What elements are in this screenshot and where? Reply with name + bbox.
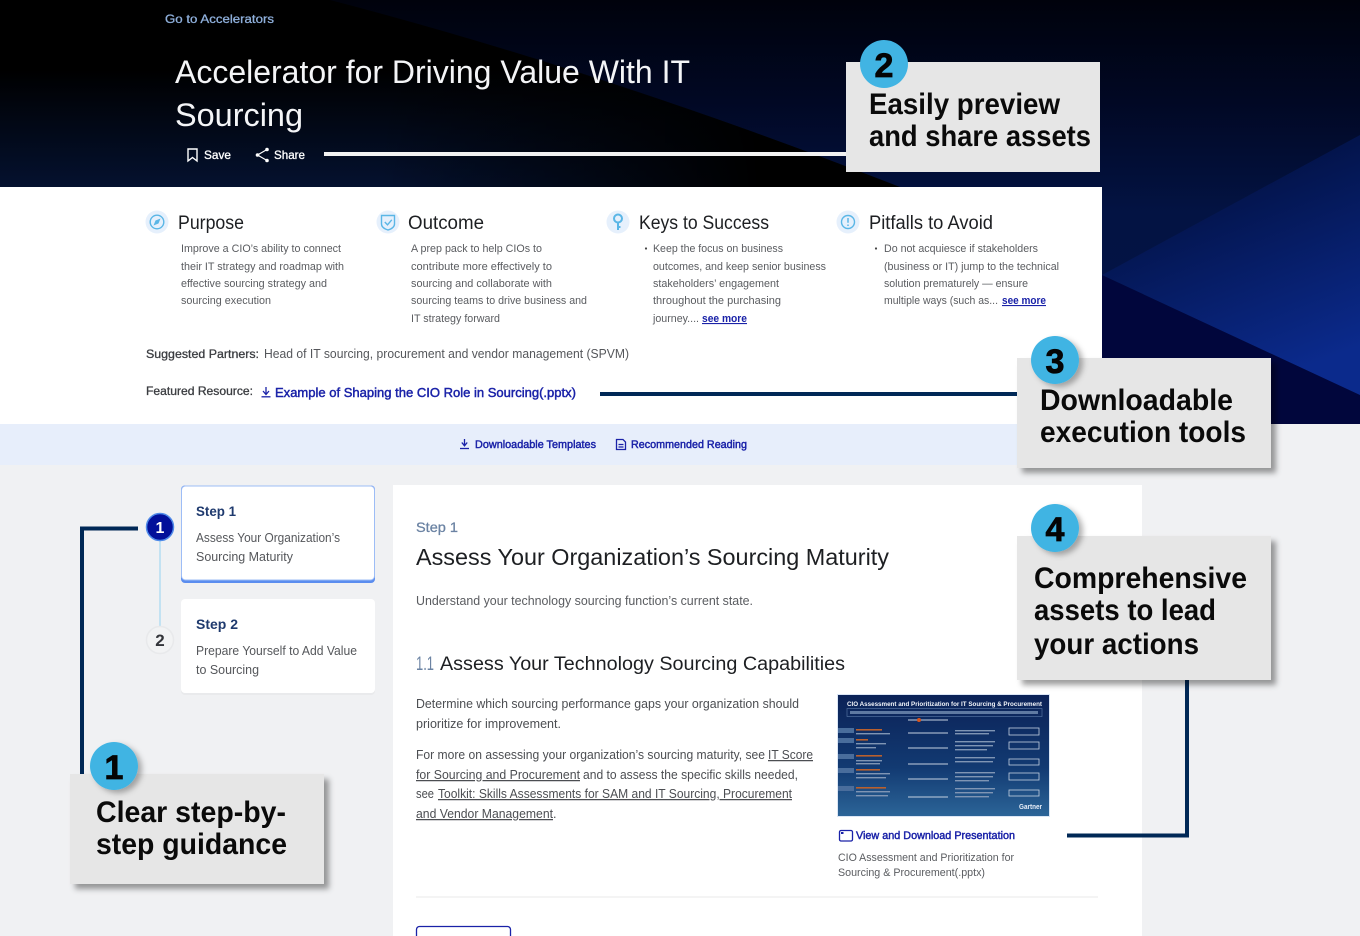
purpose column: Purpose — [178, 213, 244, 234]
badge 3: 3 — [1046, 343, 1064, 381]
callout 2: Easily preview — [869, 88, 1061, 121]
resource tab band: Downloadable Templates — [475, 439, 596, 451]
presentation thumbnail — [838, 694, 1050, 816]
badge 2: 2 — [875, 47, 893, 85]
step summary: Understand your technology sourcing function’s current state. — [416, 594, 753, 608]
body copy: Determine which sourcing performance gaps your organization should — [416, 697, 799, 711]
step card 2 — [181, 599, 375, 695]
keys to success column — [606, 210, 826, 325]
connector: callout 3 — [600, 392, 1017, 396]
panel: overview — [0, 187, 1102, 424]
presentation thumbnail: CIO Assessment and Prioritization for IT Sourcing & Procurement — [847, 702, 1042, 708]
outcome column — [376, 210, 587, 325]
connector: callout 1 — [82, 528, 138, 774]
panel: step content — [393, 485, 1142, 936]
breadcrumb link: Go to Accelerators — [165, 12, 274, 26]
outcome column: IT strategy forward — [411, 313, 500, 325]
body copy: For more on assessing your organization’s sourcing maturity, see — [416, 748, 765, 762]
suggested partners: Head of IT sourcing, procurement and vendor management (SPVM) — [264, 347, 629, 361]
icon: shield — [376, 210, 400, 234]
page title: Accelerator for Driving Value With IT — [175, 54, 690, 90]
keys to success column: Keys to Success — [639, 213, 769, 234]
suggested partners: Suggested Partners: — [146, 347, 259, 361]
featured resource: Featured Resource: — [146, 384, 253, 398]
page background — [0, 424, 1360, 936]
keys to success column: outcomes, and keep senior business — [653, 261, 826, 273]
body copy: prioritize for improvement. — [416, 717, 561, 731]
icon: key — [606, 210, 630, 234]
pitfalls column: see more — [1002, 295, 1046, 307]
callout 3: execution tools — [1040, 416, 1246, 449]
presentation caption — [838, 852, 1014, 879]
presentation thumbnail: Gartner — [1019, 804, 1042, 811]
icon: download — [460, 439, 469, 448]
step heading: Assess Your Organization’s Sourcing Maturity — [416, 544, 890, 570]
outcome column: Outcome — [408, 213, 484, 234]
step card 2: to Sourcing — [196, 663, 259, 677]
body copy: and to assess the specific skills needed, — [583, 768, 798, 782]
presentation link: View and Download Presentation — [856, 830, 1015, 842]
callout 4: assets to lead — [1034, 594, 1216, 627]
pitfalls column: Pitfalls to Avoid — [869, 213, 993, 234]
callout 3: Downloadable — [1040, 384, 1233, 417]
purpose column: Improve a CIO’s ability to connect — [181, 243, 341, 255]
step timeline — [146, 514, 174, 654]
outcome column: A prep pack to help CIOs to — [411, 243, 542, 255]
presentation caption: CIO Assessment and Prioritization for — [838, 852, 1014, 864]
callout 3 — [1017, 336, 1271, 468]
icon: compass — [146, 210, 168, 234]
callout 1: Clear step-by- — [96, 796, 286, 829]
keys to success column: journey.... — [652, 313, 699, 325]
pitfalls column: (business or IT) jump to the technical — [884, 261, 1059, 273]
outcome column: sourcing teams to drive business and — [411, 295, 587, 307]
resource tab band — [0, 424, 1102, 465]
save action: Save — [204, 148, 231, 162]
connector: callout 4 — [1067, 680, 1187, 836]
step marker 2: 2 — [155, 631, 165, 650]
featured resource — [146, 384, 576, 400]
body copy: IT Score — [768, 748, 813, 762]
callout 4: Comprehensive — [1034, 562, 1247, 595]
step label: Step 1 — [416, 519, 458, 535]
body copy: see — [416, 787, 434, 801]
callout 4 — [1017, 504, 1271, 680]
pitfalls column: solution prematurely — ensure — [884, 278, 1028, 290]
body copy: Toolkit: Skills Assessments for SAM and IT Sourcing, Procurement — [438, 787, 792, 801]
keys to success column: Keep the focus on business — [653, 243, 783, 255]
step card 2: Step 2 — [196, 616, 238, 632]
keys to success column: see more — [702, 313, 747, 325]
button outline — [416, 926, 510, 936]
callout 1 — [70, 742, 324, 884]
badge 1: 1 — [105, 749, 123, 787]
callout 2: and share assets — [869, 120, 1091, 153]
presentation caption: Sourcing & Procurement(.pptx) — [838, 867, 985, 879]
badge 4 — [1031, 504, 1079, 552]
body copy: . — [553, 807, 556, 821]
body copy — [416, 697, 813, 821]
section heading: 1.1 — [416, 654, 434, 675]
page title — [175, 54, 690, 133]
share action — [256, 148, 305, 162]
connector: callout 2 — [324, 152, 846, 156]
keys to success column: stakeholders’ engagement — [653, 278, 779, 290]
purpose column — [146, 210, 344, 307]
dark hero background — [0, 0, 1360, 424]
outcome column: sourcing and collaborate with — [411, 278, 552, 290]
page title: Sourcing — [175, 97, 303, 133]
callout 1: step guidance — [96, 828, 287, 861]
step card 2: Prepare Yourself to Add Value — [196, 644, 357, 658]
purpose column: their IT strategy and roadmap with — [181, 261, 344, 273]
step card 1: Step 1 — [196, 503, 236, 519]
callout 4: your actions — [1034, 628, 1199, 661]
badge 3 — [1031, 336, 1079, 384]
badge 2 — [860, 40, 908, 88]
icon: presentation — [840, 830, 852, 841]
keys to success column: throughout the purchasing — [653, 295, 781, 307]
save action — [188, 148, 231, 162]
share action: Share — [274, 148, 305, 162]
step marker 1: 1 — [156, 520, 165, 537]
step card 1: Sourcing Maturity — [196, 550, 294, 564]
icon: document — [616, 440, 626, 450]
section heading: Assess Your Technology Sourcing Capabilities — [440, 654, 845, 675]
badge 1 — [90, 742, 138, 790]
featured resource: Example of Shaping the CIO Role in Sourcing(.pptx) — [275, 386, 576, 400]
pitfalls column: multiple ways (such as... — [884, 295, 998, 307]
pitfalls column: Do not acquiesce if stakeholders — [884, 243, 1038, 255]
icon: download — [262, 387, 270, 397]
badge 4: 4 — [1046, 511, 1065, 549]
pitfalls column — [836, 210, 1059, 307]
resource tab band: Recommended Reading — [631, 439, 747, 451]
purpose column: sourcing execution — [181, 295, 271, 307]
purpose column: effective sourcing strategy and — [181, 278, 327, 290]
icon: alert — [836, 210, 860, 234]
step card 1: Assess Your Organization’s — [196, 531, 340, 545]
callout 2 — [846, 40, 1100, 172]
outcome column: contribute more effectively to — [411, 261, 552, 273]
body copy: for Sourcing and Procurement — [416, 768, 581, 782]
step card 1 — [181, 486, 375, 583]
body copy: and Vendor Management — [416, 807, 554, 821]
